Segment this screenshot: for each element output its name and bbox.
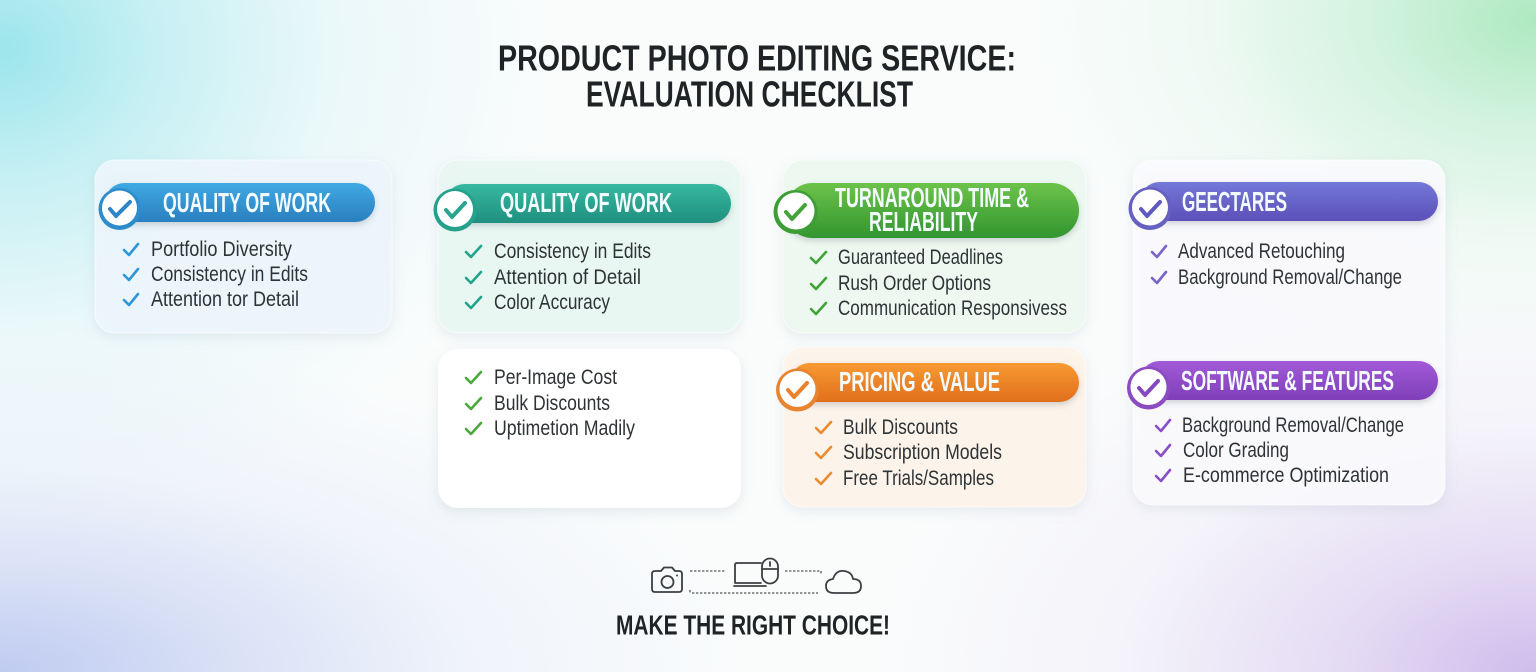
- checklist items: software and features: [1156, 414, 1404, 487]
- closing call to action: MAKE THE RIGHT CHOICE!: [616, 610, 890, 640]
- heading pill: turnaround time and reliability: RELIABILITY: [869, 206, 978, 237]
- checklist items: Subscription Models: [843, 441, 1002, 464]
- checklist items: [811, 246, 1067, 320]
- checklist items: Consistency in Edits: [151, 263, 308, 286]
- checklist items: Rush Order Options: [838, 272, 991, 295]
- heading pill: pricing and value: [776, 363, 1079, 412]
- checklist items: [466, 366, 635, 440]
- checklist items: software and features: E-commerce Optimization: [1183, 464, 1389, 487]
- icon: cloud: [826, 571, 861, 593]
- heading pill: software and features: [1127, 361, 1438, 410]
- checklist items: geectares: Advanced Retouching: [1178, 240, 1345, 263]
- panel: pricing and value: [776, 347, 1086, 507]
- checklist items: Free Trials/Samples: [843, 467, 994, 490]
- heading pill: quality of work teal: QUALITY OF WORK: [500, 187, 672, 218]
- checklist items: Consistency in Edits: [494, 240, 651, 263]
- checklist items: software and features: Color Grading: [1183, 439, 1289, 462]
- panel: quality of work (teal): [434, 160, 741, 333]
- heading pill: quality of work: QUALITY OF WORK: [163, 187, 331, 218]
- title: [498, 38, 1016, 114]
- checklist items: Guaranteed Deadlines: [838, 246, 1003, 269]
- footer workflow icons: [652, 558, 861, 593]
- checklist items: Bulk Discounts: [494, 392, 610, 415]
- checklist items: geectares: [1152, 240, 1402, 289]
- checklist items: Per-Image Cost: [494, 366, 617, 389]
- heading pill: pricing and value: PRICING & VALUE: [839, 366, 1000, 397]
- checklist items: Color Accuracy: [494, 291, 610, 314]
- panel: software and features column: [1127, 160, 1445, 505]
- checklist items: Bulk Discounts: [843, 416, 958, 439]
- checklist items: [124, 238, 308, 311]
- checklist items: Attention of Detail: [494, 266, 641, 289]
- panel: pricing items (white): [438, 349, 741, 508]
- icon: laptop: [734, 563, 766, 586]
- checklist items: geectares: Background Removal/Change: [1178, 266, 1402, 289]
- icon: camera: [652, 568, 682, 592]
- checklist items: [466, 240, 651, 314]
- panel: quality of work (blue): [95, 160, 392, 333]
- checklist items: Communication Responsivess: [838, 297, 1067, 320]
- heading pill: turnaround time and reliability: [774, 182, 1079, 238]
- checklist items: software and features: Background Removal/Change: [1182, 414, 1404, 437]
- checklist items: Portfolio Diversity: [151, 238, 292, 261]
- panel: turnaround time and reliability: [774, 160, 1086, 333]
- checklist items: Attention tor Detail: [151, 288, 299, 311]
- heading pill: quality of work: [98, 183, 375, 230]
- heading pill: turnaround time and reliability: TURNAROUND TIME &: [835, 182, 1029, 213]
- title: PRODUCT PHOTO EDITING SERVICE:: [498, 38, 1016, 78]
- icon: computer mouse: [762, 558, 778, 584]
- heading pill: software and features: SOFTWARE & FEATURES: [1181, 365, 1394, 396]
- checklist items: [816, 416, 1002, 490]
- heading pill: geectares: GEECTARES: [1182, 186, 1287, 217]
- heading pill: geectares: [1128, 182, 1438, 230]
- checklist items: Uptimetion Madily: [494, 417, 635, 440]
- heading pill: quality of work teal: [434, 184, 731, 232]
- title: EVALUATION CHECKLIST: [586, 74, 913, 114]
